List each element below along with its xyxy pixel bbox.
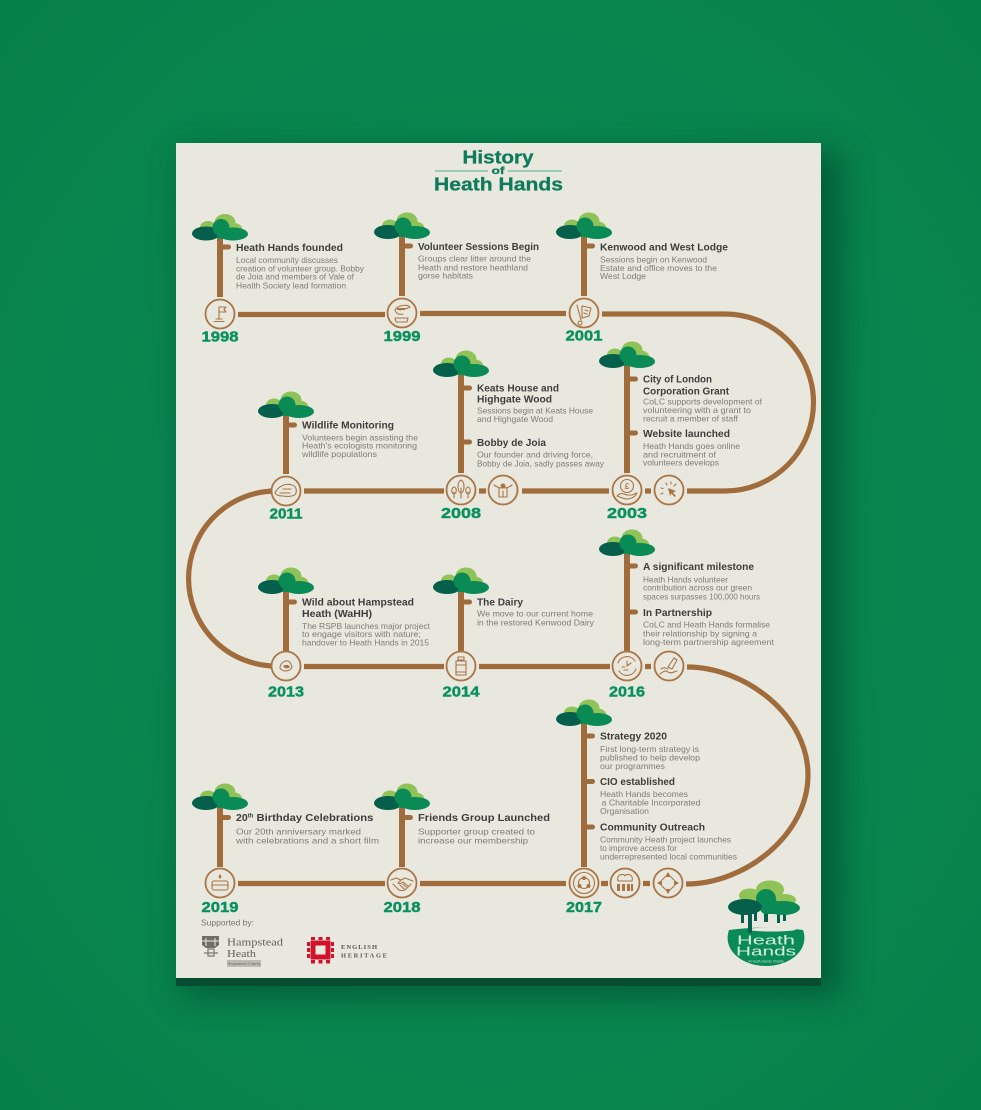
text block: [477, 596, 595, 628]
text block: First long-term strategy is: [600, 745, 699, 754]
text block: gorse habitats: [418, 272, 473, 281]
text block: 20: [236, 812, 248, 824]
text block: [418, 241, 539, 281]
milestone 1999: [374, 212, 539, 345]
milestone 1998: [192, 214, 365, 346]
text block: their relationship by signing a: [643, 630, 757, 639]
icon: tribute figure: [488, 476, 518, 504]
year: 2003: [607, 505, 647, 522]
text block: Heath and restore heathland: [418, 263, 528, 272]
text block: [302, 596, 431, 648]
text block: creation of volunteer group. Bobby: [236, 264, 365, 273]
text block: [600, 730, 737, 862]
text block: volunteers develops: [643, 459, 719, 468]
text block: CoLC and Heath Hands formalise: [643, 621, 770, 630]
text block: Birthday Celebrations: [253, 812, 374, 824]
milestone 2019: [192, 784, 379, 916]
icon: handshake: [388, 868, 416, 898]
text block: Bobby de Joia, sadly passes away: [477, 460, 605, 469]
milestone 2017: [556, 700, 737, 916]
icon: website cursor: [654, 476, 684, 504]
text block: contribution across our green: [643, 584, 752, 593]
text block: CoLC supports development of: [643, 398, 763, 407]
year: 2016: [609, 684, 645, 700]
tree and trunk: [192, 784, 248, 867]
milestone 2018: [374, 784, 550, 916]
tree and trunk: [374, 784, 430, 867]
logo: English Heritage: HERITAGE: [341, 952, 387, 960]
text block: A significant milestone: [643, 561, 754, 573]
title: History: [462, 146, 534, 168]
tree and trunk: [433, 350, 489, 473]
text block: wildlife populations: [301, 450, 377, 459]
text block: [236, 242, 365, 290]
text block: and Highgate Wood: [477, 415, 553, 424]
tree and trunk: [556, 700, 612, 867]
year: 2019: [202, 899, 238, 916]
year: 2014: [442, 684, 480, 700]
text block: [235, 812, 379, 846]
text block: Organisation: [600, 807, 649, 816]
year: 1999: [384, 328, 420, 345]
text block: and recruitment of: [643, 451, 717, 460]
title: of: [492, 166, 505, 177]
poster paper: [176, 143, 821, 978]
text block: Strategy 2020: [600, 730, 667, 742]
text block: [643, 374, 763, 468]
text block: volunteering with a grant to: [643, 406, 751, 415]
text block: CIO established: [600, 776, 675, 788]
text block: Health Society lead formation: [236, 281, 346, 290]
tree and trunk: [599, 530, 655, 651]
logo: Hampstead Heath: Registered Charity: [227, 961, 261, 966]
text block: Our 20th anniversary marked: [236, 828, 362, 837]
text block: increase our membership: [418, 837, 529, 846]
text block: Kenwood and West Lodge: [600, 242, 728, 254]
tree and trunk: [258, 392, 314, 474]
tree and trunk: [258, 568, 314, 652]
text block: [600, 242, 728, 281]
text block: Heath Hands volunteer: [643, 576, 728, 585]
tree and trunk: [374, 212, 430, 296]
icon: woodland trees: [446, 476, 476, 504]
text block: spaces surpasses 100,000 hours: [643, 593, 760, 602]
text block: City of London: [643, 374, 712, 386]
text block: in the restored Kenwood Dairy: [477, 619, 595, 628]
year: 1998: [202, 328, 238, 346]
logo: Heath Hands: A Heath Hands Charity: [748, 960, 784, 964]
icon: signing pen: [654, 652, 684, 680]
icon: hand and plant: [388, 298, 416, 328]
poster shadow: [176, 150, 842, 997]
logo: English Heritage: [307, 937, 387, 964]
text block: Community Outreach: [600, 822, 705, 834]
text block: Volunteers begin assisting the: [302, 433, 418, 442]
year: 2018: [384, 899, 420, 916]
text block: West Lodge: [600, 272, 646, 281]
text block: Sessions begin on Kenwood: [600, 256, 707, 265]
milestone 2011: [258, 392, 418, 522]
text block: th: [248, 814, 254, 820]
year: 2011: [270, 506, 302, 522]
text block: Local community discusses: [236, 256, 338, 265]
logo: Hampstead Heath: [202, 936, 284, 967]
logo: Heath Hands: Hands: [736, 944, 796, 958]
text block: [477, 382, 605, 469]
text block: Keats House and: [477, 382, 559, 394]
icon: milk churn: [446, 652, 476, 680]
text block: Our founder and driving force,: [477, 451, 593, 460]
text block: de Joia and members of Vale of: [236, 273, 355, 282]
tree and trunk: [556, 212, 612, 296]
text block: Wildlife Monitoring: [302, 420, 394, 432]
text block: a Charitable Incorporated: [602, 799, 701, 808]
text block: Wild about Hampstead: [302, 596, 414, 608]
text block: We move to our current home: [477, 610, 593, 619]
text block: to improve access for: [600, 844, 677, 853]
text block: recruit a member of staff: [643, 415, 739, 424]
text block: Highgate Wood: [477, 394, 552, 406]
year: 2001: [566, 328, 602, 344]
icon: pound coin in hand: £: [625, 482, 630, 491]
text block: Sessions begin at Keats House: [477, 407, 593, 416]
logo: English Heritage: ENGLISH: [341, 944, 377, 951]
text block: [643, 561, 775, 647]
text block: Website launched: [643, 428, 730, 440]
text block: Estate and office moves to the: [600, 264, 717, 273]
supporters: [201, 918, 387, 967]
tree and trunk: [433, 568, 489, 652]
icon: clock: [612, 652, 642, 680]
text block: Community Heath project launches: [600, 836, 731, 845]
text block: handover to Heath Hands in 2015: [302, 639, 429, 648]
supported by label: Supported by:: [201, 918, 254, 928]
year: 2017: [566, 899, 602, 916]
icon: strategy cycle: [570, 868, 598, 898]
text block: The RSPB launches major project: [302, 622, 431, 631]
text block: [418, 812, 550, 846]
icon: birthday cake: [206, 868, 234, 898]
text block: Supporter group created to: [418, 828, 536, 837]
logo: Hampstead Heath: Hampstead: [227, 936, 284, 948]
year: 2008: [441, 505, 481, 522]
icon: bird: [272, 652, 300, 680]
text block: The Dairy: [477, 596, 523, 608]
icon: golf flag: [206, 300, 234, 328]
text block: published to help develop: [600, 754, 700, 763]
logo: Heath Hands: Heath: [737, 934, 795, 948]
text block: underrepresented local communities: [600, 853, 737, 862]
text block: [301, 420, 418, 459]
milestone 2014: [433, 568, 595, 700]
tree and trunk: [192, 214, 248, 297]
text block: our programmes: [600, 762, 665, 771]
text block: Volunteer Sessions Begin: [418, 241, 539, 253]
text block: long-term partnership agreement: [643, 638, 775, 647]
timeline path: [189, 314, 813, 884]
text block: Heath Hands goes online: [643, 442, 740, 451]
text block: Heath (WaHH): [302, 608, 372, 620]
logo: Hampstead Heath: Heath: [227, 948, 257, 960]
milestone 2001: [556, 212, 728, 344]
text block: Groups clear litter around the: [418, 255, 531, 264]
title: [434, 146, 563, 194]
milestone 2016: [599, 530, 775, 700]
text block: Friends Group Launched: [418, 812, 550, 824]
text block: Bobby de Joia: [477, 437, 546, 449]
icon: charity people: [610, 868, 640, 898]
text block: Corporation Grant: [643, 386, 729, 398]
logo: Heath Hands: [728, 880, 804, 966]
icon: wheelbarrow: [570, 298, 598, 328]
text block: Heath's ecologists monitoring: [302, 442, 417, 451]
tree and trunk: [599, 342, 655, 473]
year: 2013: [268, 684, 304, 700]
icon: community compass: [654, 868, 682, 898]
text block: Heath Hands founded: [236, 242, 343, 254]
text block: In Partnership: [643, 607, 712, 619]
icon: pound coin in hand: [612, 476, 642, 504]
text block: Heath Hands becomes: [600, 790, 688, 799]
milestone 2008: [433, 350, 605, 522]
title: Heath Hands: [434, 174, 563, 194]
text block: to engage visitors with nature;: [302, 630, 421, 639]
milestone 2013: [258, 568, 431, 700]
milestone 2003: [599, 342, 763, 522]
text block: with celebrations and a short film: [235, 837, 379, 846]
icon: hedgehog: [272, 476, 300, 506]
